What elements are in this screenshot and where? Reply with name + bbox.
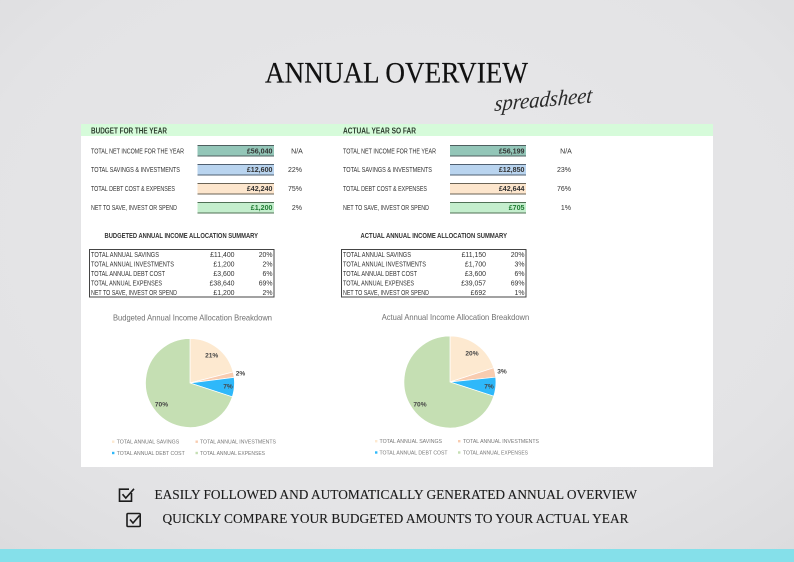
row: total net income: TOTAL NET INCOME FOR THE YEAR [343,148,436,155]
row: net to save: NET TO SAVE, INVEST OR SPEND [343,205,429,212]
heading: actual allocation summary: ACTUAL ANNUAL INCOME ALLOCATION SUMMARY [360,233,507,240]
row: total savings and investments: £12,850 [499,166,525,174]
pie slices [404,336,496,428]
table: budgeted allocation: TOTAL ANNUAL SAVINGS [91,252,159,259]
row: net to save: 1% [561,205,571,212]
icon: checkbox 1 [120,489,134,501]
table: actual allocation: £3,600 [465,271,486,278]
row: total debt cost and expenses [343,184,571,194]
row: total savings and investments: 22% [288,167,302,174]
table: actual allocation: £692 [471,290,486,297]
row: total debt cost and expenses: TOTAL DEBT COST & EXPENSES [343,186,427,193]
table: budgeted allocation: 20% [259,252,272,259]
row: total savings and investments: TOTAL SAVINGS & INVESTMENTS [343,167,432,174]
table: actual allocation [342,250,526,297]
row: net to save [91,202,302,213]
row: total debt cost and expenses: £42,240 [247,185,273,193]
pie labels [413,350,507,409]
table: actual allocation: TOTAL ANNUAL SAVINGS [343,252,411,259]
pie labels: 7% [484,383,494,390]
pie labels: 21% [205,353,218,360]
pie labels: 70% [413,402,427,409]
row: net to save: £1,200 [251,204,273,212]
legend [112,440,276,457]
panel: budget summary rows [91,146,303,213]
row: total savings and investments [91,164,302,175]
row: total net income [91,146,303,156]
panel: actual summary rows [343,146,572,213]
title: ANNUAL OVERVIEW [265,58,528,90]
pie labels: 20% [465,350,479,357]
table: actual allocation: NET TO SAVE, INVEST OR SPEND [343,290,429,297]
row: net to save: £705 [509,204,525,212]
legend: TOTAL ANNUAL SAVINGS [117,440,179,446]
table: budgeted allocation: £1,200 [213,262,235,269]
row: total debt cost and expenses: 75% [288,186,302,193]
chart title: Budgeted Annual Income Allocation Breakdown [113,312,272,322]
table: budgeted allocation: £38,640 [210,281,235,288]
row: total debt cost and expenses [91,184,302,194]
row: net to save: 2% [292,205,302,212]
header band [81,124,713,136]
chart: actual pie [375,312,539,456]
panel: spreadsheet screenshot [81,124,713,467]
row: total net income: N/A [291,148,303,155]
heading: budgeted allocation summary: BUDGETED ANNUAL INCOME ALLOCATION SUMMARY [104,233,258,240]
footer band [0,549,794,562]
table: budgeted allocation: 69% [259,281,272,288]
row: total debt cost and expenses: TOTAL DEBT COST & EXPENSES [91,186,175,193]
row: net to save: NET TO SAVE, INVEST OR SPEND [91,205,177,212]
row: total debt cost and expenses: 76% [557,186,571,193]
legend: TOTAL ANNUAL INVESTMENTS [463,439,539,445]
row: net to save [343,202,571,213]
row: total net income [343,146,572,156]
legend: TOTAL ANNUAL SAVINGS [380,439,442,445]
table: budgeted allocation: 6% [263,271,272,278]
table: actual allocation: £39,057 [461,281,486,288]
legend: TOTAL ANNUAL DEBT COST [117,451,185,457]
feature line 2: QUICKLY COMPARE YOUR BUDGETED AMOUNTS TO YOUR ACTUAL YEAR [162,511,629,526]
table: budgeted allocation: TOTAL ANNUAL INVESTMENTS [91,262,174,269]
table: actual allocation: 1% [515,290,524,297]
header band: ACTUAL YEAR SO FAR [343,126,416,136]
row: total savings and investments: TOTAL SAVINGS & INVESTMENTS [91,167,180,174]
table: budgeted allocation: NET TO SAVE, INVEST OR SPEND [91,290,177,297]
table: actual allocation: 20% [511,252,524,259]
table: budgeted allocation: 2% [263,290,272,297]
legend: TOTAL ANNUAL INVESTMENTS [200,440,276,446]
chart: budgeted pie [112,312,276,457]
feature line 1: EASILY FOLLOWED AND AUTOMATICALLY GENERATED ANNUAL OVERVIEW [154,487,637,502]
table: actual allocation: £1,700 [465,262,486,269]
legend [375,439,539,456]
table: budgeted allocation: TOTAL ANNUAL EXPENSES [91,281,162,288]
table: budgeted allocation: £3,600 [213,271,235,278]
pie labels: 70% [155,401,168,408]
table: budgeted allocation: TOTAL ANNUAL DEBT COST [91,271,166,278]
table: budgeted allocation: £11,400 [210,252,235,259]
header band: BUDGET FOR THE YEAR [91,126,167,136]
icon: checkbox 2 [127,514,140,526]
table: budgeted allocation: 2% [263,262,272,269]
table: actual allocation: TOTAL ANNUAL INVESTMENTS [343,262,426,269]
row: total savings and investments: £12,600 [247,166,273,174]
pie labels: 7% [223,383,233,390]
table: budgeted allocation: £1,200 [213,290,235,297]
row: total debt cost and expenses: £42,644 [499,185,525,193]
table: actual allocation: 6% [515,271,524,278]
pie labels: 3% [497,368,507,375]
row: total savings and investments: 23% [557,167,571,174]
table: actual allocation: TOTAL ANNUAL DEBT COST [343,271,418,278]
row: total net income: £56,040 [247,147,273,155]
legend: TOTAL ANNUAL EXPENSES [463,450,528,456]
row: total savings and investments [343,164,571,175]
subtitle: spreadsheet: spreadsheet [494,82,594,116]
table: actual allocation: 69% [511,281,524,288]
legend: TOTAL ANNUAL EXPENSES [200,451,265,457]
row: total net income: £56,199 [499,147,525,155]
legend: TOTAL ANNUAL DEBT COST [380,450,448,456]
table: actual allocation: TOTAL ANNUAL EXPENSES [343,281,414,288]
table: budgeted allocation [90,250,274,297]
row: total net income: TOTAL NET INCOME FOR THE YEAR [91,148,184,155]
pie labels: 2% [236,370,245,377]
row: total net income: N/A [560,148,572,155]
table: actual allocation: £11,150 [462,252,486,259]
table: actual allocation: 3% [515,262,524,269]
pie labels [155,353,245,408]
pie slices [145,338,234,428]
chart title: Actual Annual Income Allocation Breakdown [382,312,530,322]
